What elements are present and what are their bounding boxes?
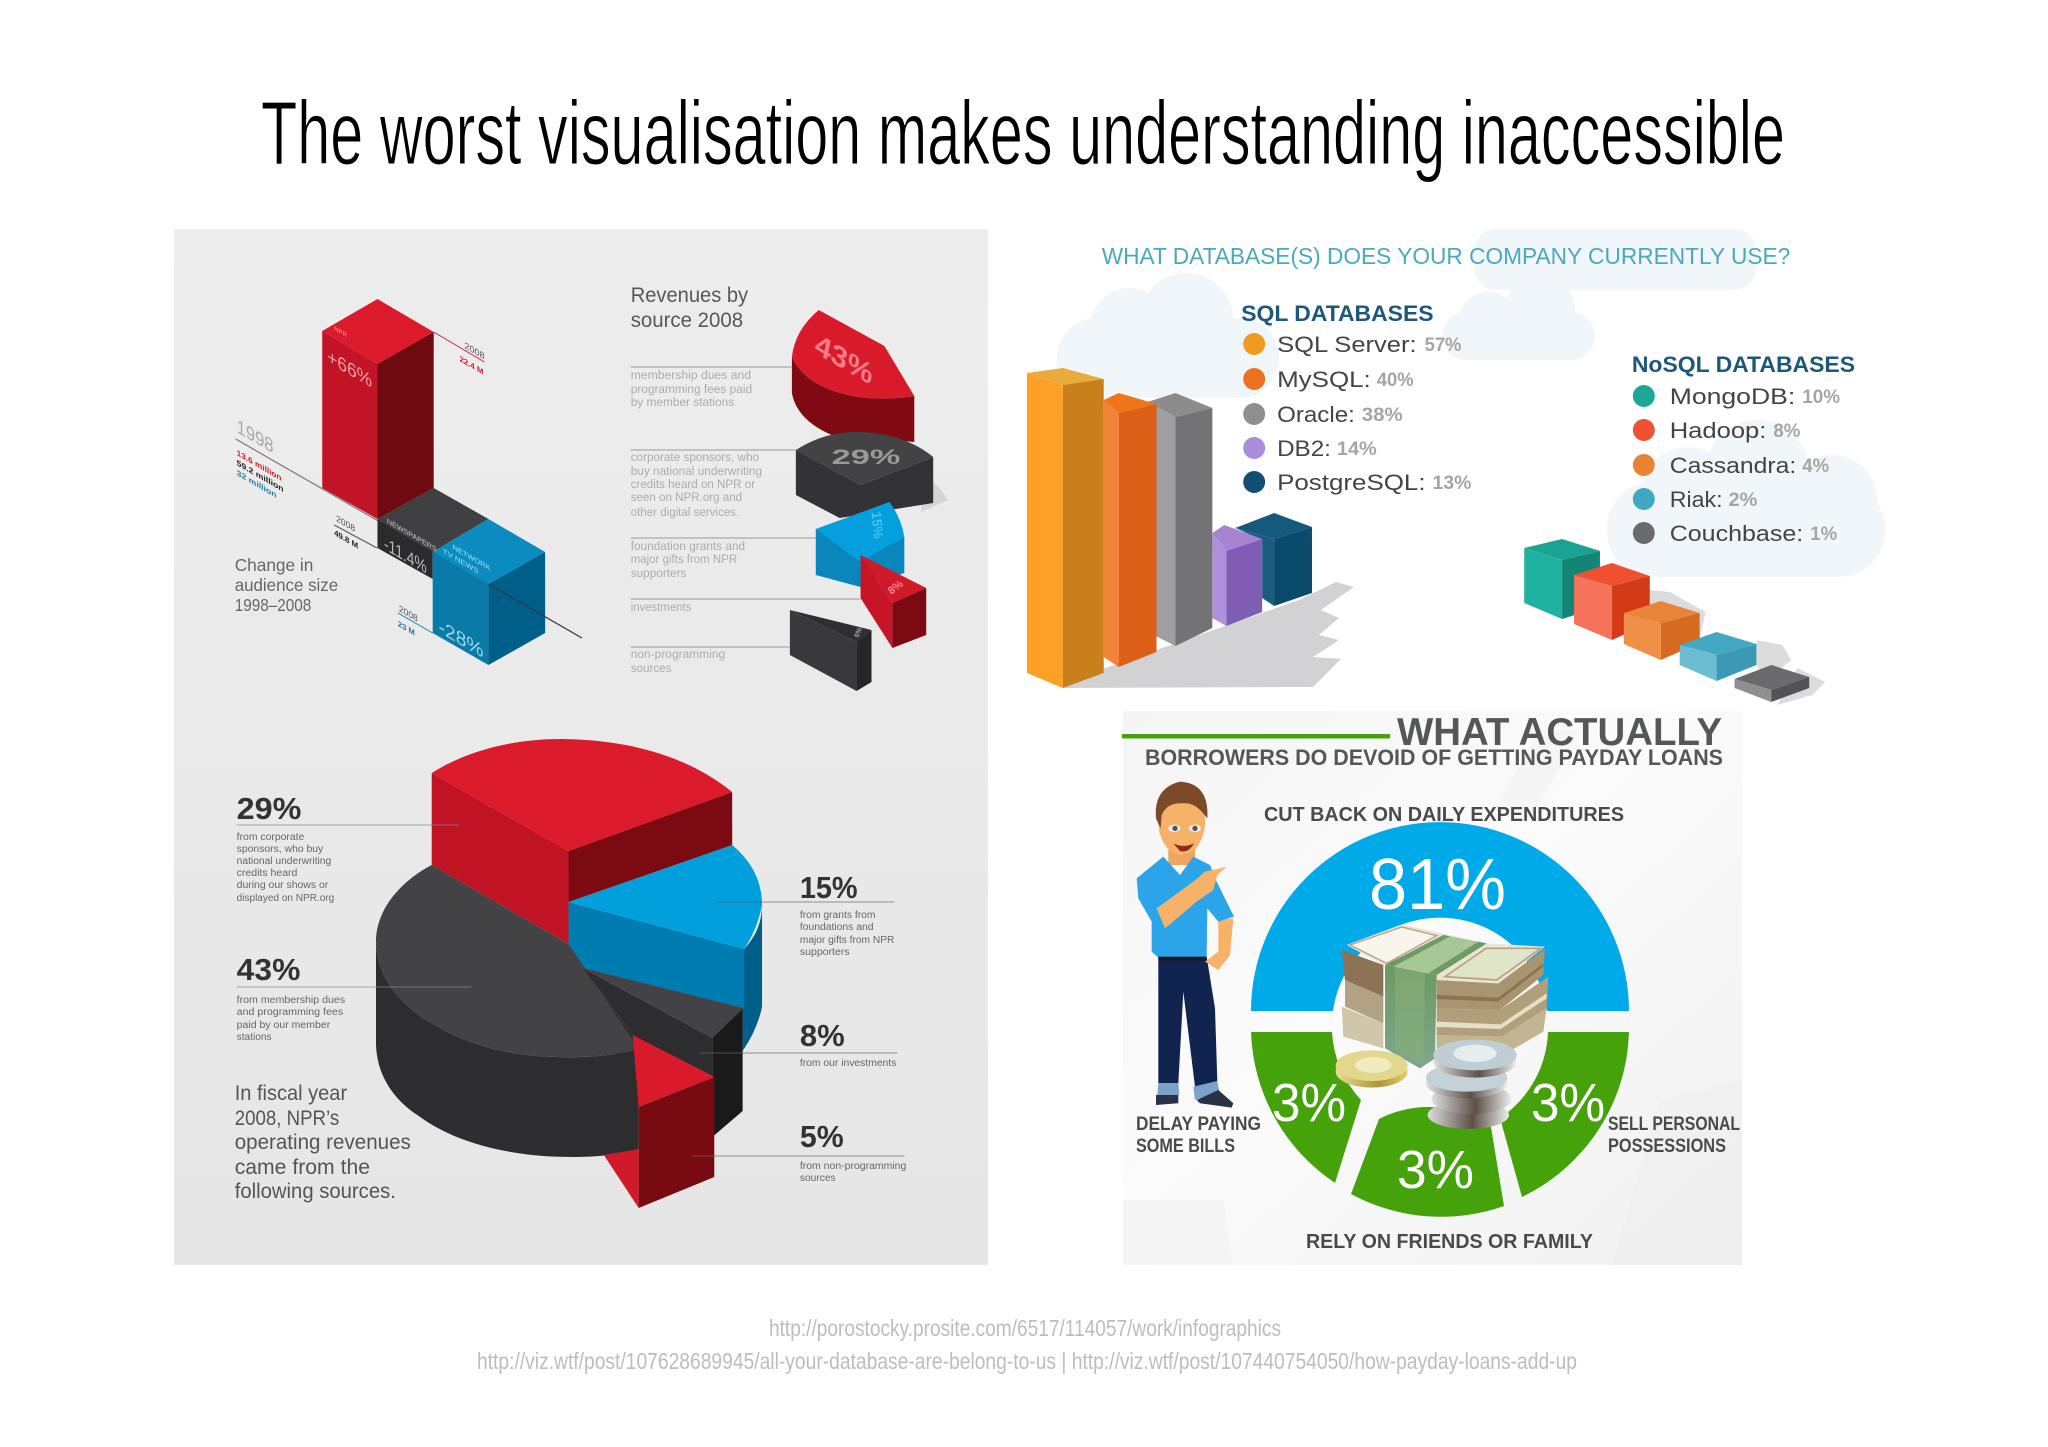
chart: change in audience size isometric bars: 2008 [336,514,355,535]
legend: SQL databases: 13% [1433,473,1472,494]
text: change in audience size: audience size [235,575,338,595]
pie labels: left: national underwriting [237,856,331,867]
pie labels: right: 15% [800,870,858,905]
pie labels: right: 5% [800,1119,844,1154]
text: revenue source descriptions: corporate sponsors, who [631,450,759,464]
text: fiscal year intro: operating revenues [235,1131,411,1154]
chart: exploded revenue wedges [790,310,948,691]
legend: NoSQL databases: Cassandra: [1670,453,1796,478]
heading: NoSQL databases: NoSQL DATABASES [1632,352,1855,377]
pie labels: left: 29% [237,791,301,826]
chart: exploded revenue wedges: 29% [832,446,901,469]
text: change in audience size: Change in [235,555,313,575]
chart: donut segments 3 percent: 3% [1272,1073,1346,1133]
subheading: payday loans: BORROWERS DO DEVOID OF GETTING PAYDAY LOANS [1145,745,1723,770]
source links: http://porostocky.prosite.com/6517/114057/work/infographics [769,1315,1281,1341]
chart: change in audience size isometric bars: 2008 [465,341,484,362]
label: delay paying some bills [1136,1114,1261,1157]
chart: change in audience size isometric bars: +66% [327,345,372,393]
legend: NoSQL databases: Hadoop: [1670,418,1766,443]
pie labels: right [691,870,906,1184]
text: revenues by source 2008: source 2008 [631,309,743,332]
chart: NoSQL 3D cubes [1524,539,1825,705]
icon: man pointing [1137,782,1234,1108]
text: fiscal year intro: In fiscal year [235,1082,347,1105]
source links [477,1315,1577,1374]
chart: donut segments 3 percent [1251,1032,1629,1217]
text: revenue source descriptions: buy national underwriting [631,464,762,478]
clouds background [1057,229,1885,577]
legend: SQL databases: Oracle: [1277,402,1355,427]
heading: what actually: WHAT ACTUALLY [1397,711,1722,754]
text: fiscal year intro [235,1082,411,1203]
chart: donut 81 percent [1251,822,1629,1011]
legend: NoSQL databases: 8% [1773,421,1800,442]
legend: NoSQL databases [1633,384,1840,546]
text: change in audience size: 1998–2008 [235,595,311,615]
text: revenue source descriptions: supporters [631,566,686,580]
text: revenue source descriptions: investments [631,600,691,614]
chart: donut segments 3 percent: 3% [1531,1073,1605,1133]
heading: database question: WHAT DATABASE(S) DOES YOUR COMPANY CURRENTLY USE? [1102,243,1790,269]
legend: NoSQL databases: 1% [1810,524,1837,545]
pie labels: right: foundations and [800,922,874,933]
text: revenue source descriptions: membership dues and [631,368,751,382]
legend: SQL databases [1243,332,1472,495]
chart: exploded revenue wedges: 43% [813,327,876,391]
chart: change in audience size isometric bars: NEWSPAPERS [387,517,437,554]
chart: change in audience size isometric bars: 22.4 M [460,354,483,377]
legend: SQL databases: SQL Server: [1277,332,1417,357]
chart: change in audience size isometric bars: NPR [334,325,347,339]
label: sell personal possessions [1608,1114,1740,1157]
label: rely on friends or family: RELY ON FRIENDS OR FAMILY [1306,1231,1594,1253]
legend: SQL databases: PostgreSQL: [1277,470,1426,495]
text: revenue source descriptions: non-programming [631,647,725,661]
pie labels: right: sources [800,1173,836,1184]
chart: change in audience size isometric bars: -28% [439,615,483,663]
label: delay paying some bills: DELAY PAYING [1136,1114,1261,1135]
chart: change in audience size isometric bars: 23 M [398,619,415,638]
legend: SQL databases: 14% [1337,439,1377,460]
text: revenue source descriptions: sources [631,661,672,675]
pie labels: right: from non-programming [800,1161,906,1172]
chart: change in audience size isometric bars: 59.2 million [237,458,283,494]
text: revenue source descriptions: credits heard on NPR or [631,477,755,491]
chart: donut segments 3 percent: 3% [1397,1140,1474,1200]
legend: NoSQL databases: 4% [1802,456,1829,477]
panel: payday loans infographic [1122,711,1742,1265]
chart: change in audience size isometric bars [236,299,582,665]
chart: SQL 3D bars [1027,368,1354,688]
pie labels: left: from membership dues [237,995,345,1006]
chart: change in audience size isometric bars: 2008 [399,604,418,625]
chart: exploded revenue wedges: 8% [886,578,906,597]
pie labels: right: major gifts from NPR [800,935,895,946]
text: change in audience size [235,555,338,615]
chart: exploded revenue wedges: 15% [869,511,887,540]
heading: SQL databases: SQL DATABASES [1241,301,1434,326]
label: cut back on daily expenditures: CUT BACK ON DAILY EXPENDITURES [1264,804,1624,826]
pie labels: left: sponsors, who buy [237,844,324,855]
legend: NoSQL databases: 10% [1802,387,1840,408]
pie labels: left: during our shows or [237,880,329,891]
text: revenue source descriptions: major gifts from NPR [631,552,738,566]
chart: exploded revenue wedges: 5% [854,626,864,639]
legend: NoSQL databases: Couchbase: [1670,521,1803,546]
pie labels: left: and programming fees [237,1007,343,1018]
legend: SQL databases: 40% [1377,370,1414,391]
pie labels: left: credits heard [237,868,298,879]
label: sell personal possessions: SELL PERSONAL [1608,1114,1740,1135]
accent line [1122,734,1390,738]
source links: http://viz.wtf/post/107628689945/all-your-database-are-belong-to-us | http://viz.wtf/post/107440754050/how-payday-loans-add-up [477,1348,1577,1374]
text: fiscal year intro: following sources. [235,1180,396,1203]
pie labels: right: from our investments [800,1058,896,1069]
chart: change in audience size isometric bars: 1998 [237,415,274,458]
pie labels: right: supporters [800,947,850,958]
chart: change in audience size isometric bars: 13.6 million [237,448,281,483]
pie labels: left: stations [237,1032,272,1043]
chart: change in audience size isometric bars: NETWORK [453,543,490,573]
legend: SQL databases: DB2: [1277,436,1331,461]
legend: SQL databases: 57% [1425,335,1462,356]
pie labels: right: 8% [800,1018,845,1053]
pie labels: left: 43% [237,952,300,987]
text: revenue source descriptions: other digital services. [631,505,739,519]
pie labels: right: from grants from [800,910,876,921]
text: revenue source descriptions: by member stations [631,395,734,409]
legend: SQL databases: 38% [1362,405,1403,426]
chart: change in audience size isometric bars: 49.8 M [334,528,358,551]
icon: money stack and coins [1336,924,1548,1129]
pie labels: left: paid by our member [237,1020,331,1031]
text: revenue source descriptions [631,367,861,675]
legend: NoSQL databases: 2% [1729,490,1758,511]
chart: donut 81 percent: 81% [1369,845,1506,925]
text: revenue source descriptions: foundation grants and [631,539,745,553]
pie labels: left [237,791,472,1043]
pie labels: left: from corporate [237,832,305,843]
text: fiscal year intro: came from the [235,1156,370,1179]
panel: database usage infographic [1027,229,1885,705]
chart: change in audience size isometric bars: 32 million [237,468,276,500]
legend: SQL databases: MySQL: [1277,367,1371,392]
text: revenue source descriptions: programming fees paid [631,382,752,396]
chart: change in audience size isometric bars: -11.4% [384,533,427,578]
text: revenue source descriptions: seen on NPR.org and [631,490,742,504]
legend: NoSQL databases: Riak: [1670,487,1723,512]
text: revenues by source 2008 [631,284,749,332]
chart: exploded 3D revenue pie [376,739,762,1208]
text: fiscal year intro: 2008, NPR’s [235,1107,339,1130]
legend: NoSQL databases: MongoDB: [1670,384,1795,409]
chart: change in audience size isometric bars: TV NEWS [443,547,478,576]
text: revenues by source 2008: Revenues by [631,284,749,307]
panel: NPR audience and revenue infographic [174,229,988,1265]
label: sell personal possessions: POSSESSIONS [1608,1136,1726,1157]
pie labels: left: displayed on NPR.org [237,893,334,904]
label: delay paying some bills: SOME BILLS [1136,1136,1235,1157]
